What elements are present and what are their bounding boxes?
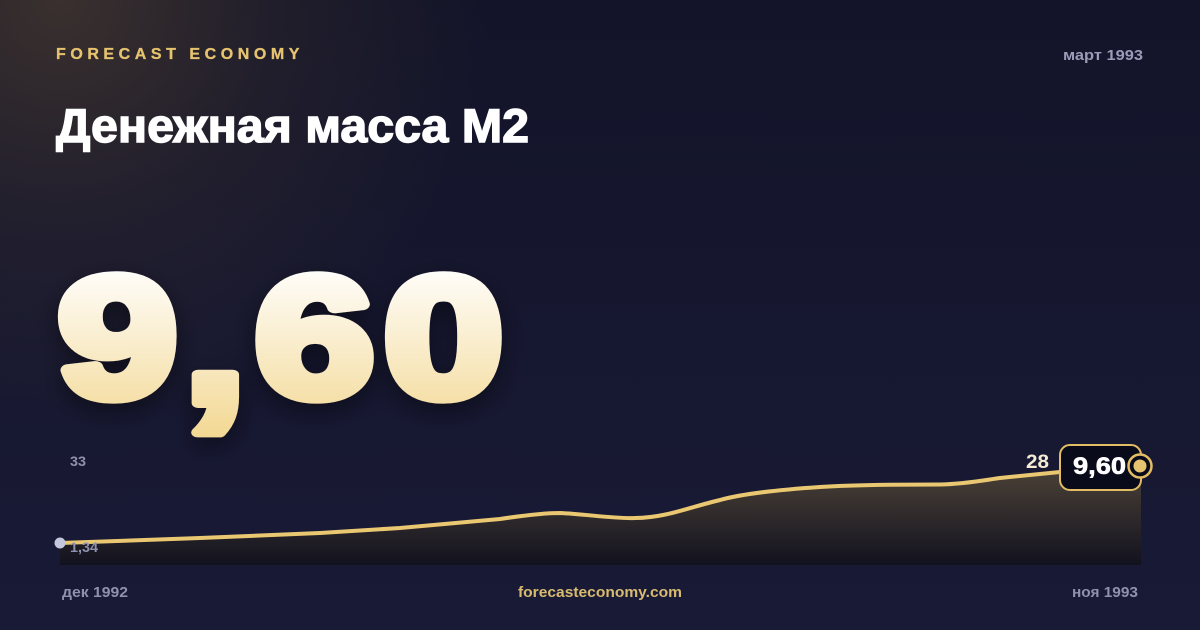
start date: дек 1992 [62, 584, 128, 601]
big value: 6 [255, 243, 374, 433]
axis max label: 33 [70, 453, 86, 469]
brand label: FORECAST ECONOMY [56, 46, 304, 63]
website: forecasteconomy.com [518, 584, 682, 601]
line [60, 472, 1060, 543]
big value: 0 [384, 243, 503, 433]
start point [54, 538, 66, 548]
area fill [60, 466, 1141, 565]
title: Денежная масса М2 [56, 99, 529, 152]
last period label: 28 [1026, 452, 1049, 473]
big value: 9 [58, 243, 177, 433]
value badge [1060, 445, 1141, 490]
value badge: 9,60 [1073, 453, 1126, 480]
big value [58, 232, 503, 444]
big value: , [181, 232, 249, 444]
axis min label: 1,34 [70, 539, 98, 555]
date label: март 1993 [1063, 47, 1143, 64]
area chart [54, 466, 1141, 565]
end point marker [1128, 454, 1152, 478]
end date: ноя 1993 [1072, 584, 1138, 601]
